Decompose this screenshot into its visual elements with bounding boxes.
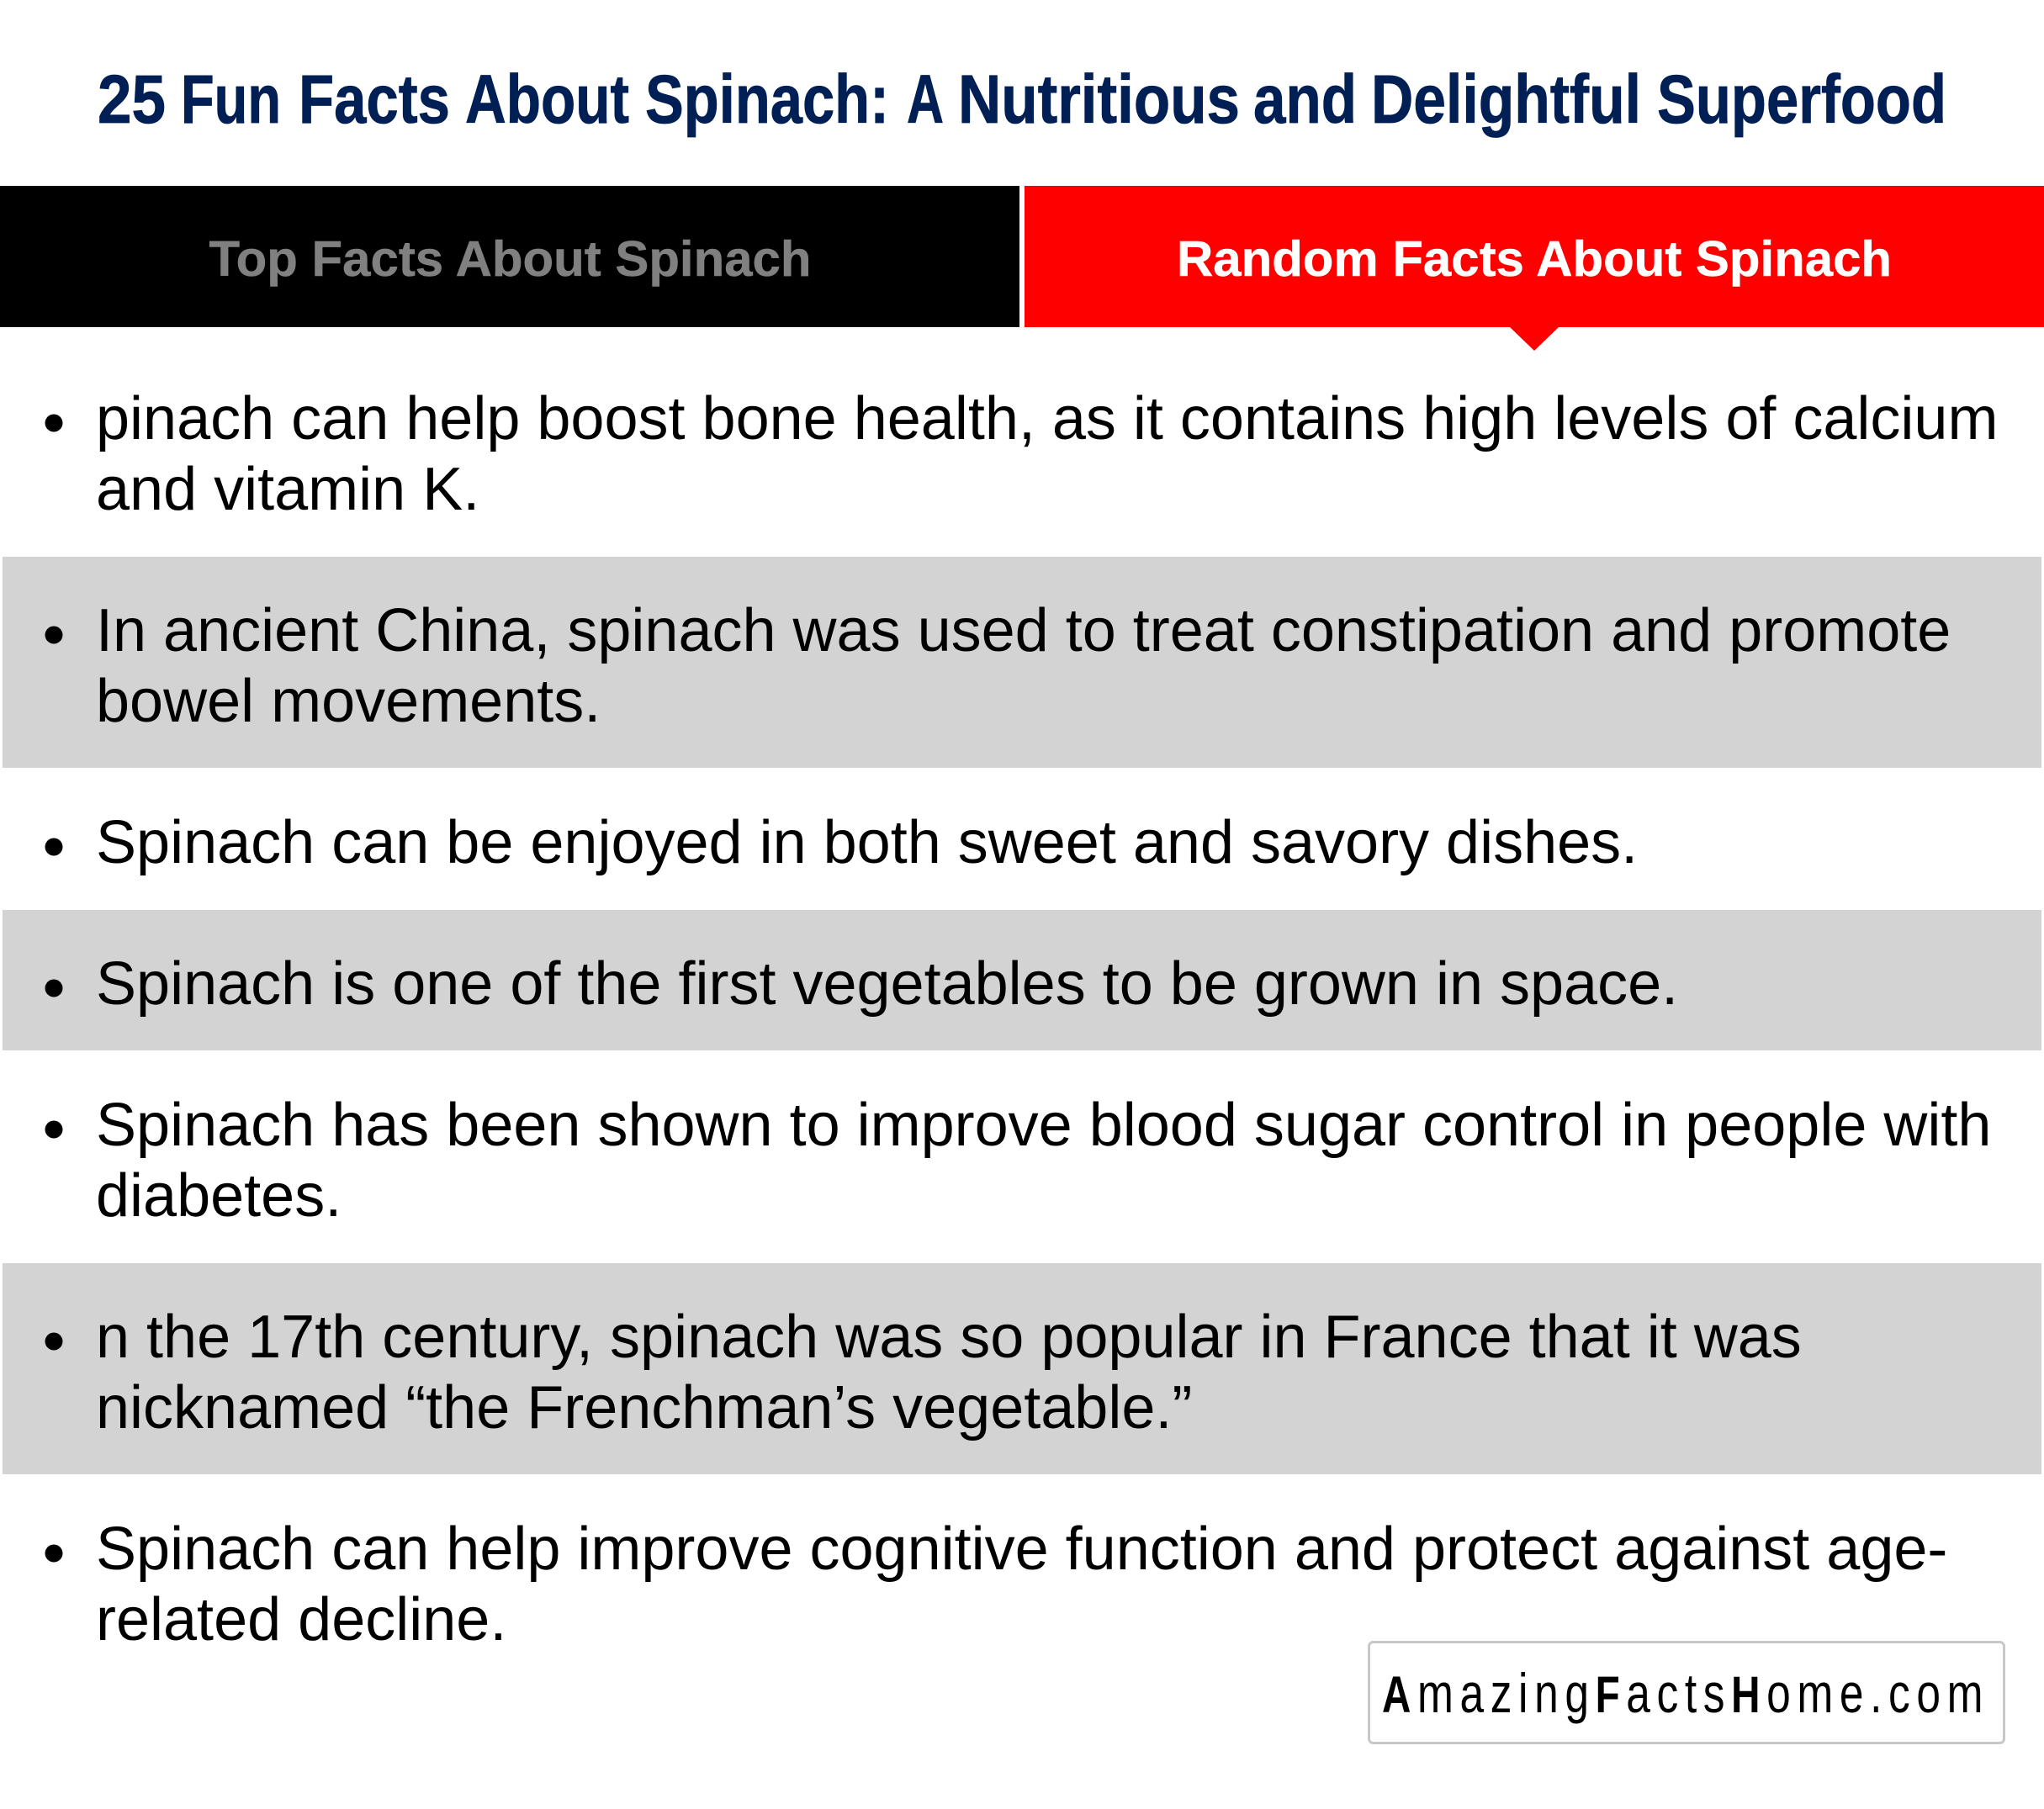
- tab: top facts: Top Facts About Spinach: [209, 231, 811, 287]
- fact 4 row: Spinach is one of the first vegetables to be grown in space.: [96, 950, 1678, 1018]
- title: Spinach:: [645, 61, 889, 138]
- fact 5: diabetes.: [96, 1162, 342, 1230]
- watermark badge: AmazingFactsHome.com: [1382, 1662, 1983, 1724]
- fact 6 row: n the 17th century, spinach was so popular in France that it was: [96, 1304, 1802, 1371]
- title: and: [1253, 61, 1357, 138]
- fact 5: [45, 1092, 1991, 1230]
- watermark badge: [1369, 1642, 2004, 1743]
- title: A: [907, 61, 944, 138]
- fact 1: and vitamin K.: [96, 456, 479, 523]
- fact 5: Spinach has been shown to improve blood sugar control in people with: [96, 1092, 1991, 1159]
- tab: random facts: Random Facts About Spinach: [1177, 231, 1892, 287]
- title: Facts: [299, 61, 450, 138]
- fact 2 row: In ancient China, spinach was used to treat constipation and promote: [96, 597, 1951, 664]
- title: [98, 61, 1946, 138]
- fact 6 row: [3, 1263, 2041, 1474]
- fact 6 row: nicknamed “the Frenchman’s vegetable.”: [96, 1374, 1192, 1441]
- fact 4 row: [3, 910, 2041, 1050]
- fact 2 row: bowel movements.: [96, 668, 601, 735]
- tab: top facts: [0, 186, 1019, 327]
- fact 1: [45, 385, 1998, 523]
- title: Nutritious: [958, 61, 1240, 138]
- title: Superfood: [1657, 61, 1946, 138]
- title: About: [465, 61, 629, 138]
- title: Fun: [181, 61, 281, 138]
- title: 25: [98, 61, 166, 138]
- fact 7: related decline.: [96, 1586, 506, 1653]
- fact 1: pinach can help boost bone health, as it contains high levels of calcium: [96, 385, 1998, 452]
- tab: random facts: [1025, 186, 2044, 351]
- fact 2 row: [3, 557, 2041, 768]
- fact 7: Spinach can help improve cognitive function and protect against age-: [96, 1515, 1947, 1583]
- fact 3: Spinach can be enjoyed in both sweet and savory dishes.: [96, 809, 1638, 876]
- fact 7: [45, 1515, 1947, 1653]
- title: Delightful: [1371, 61, 1641, 138]
